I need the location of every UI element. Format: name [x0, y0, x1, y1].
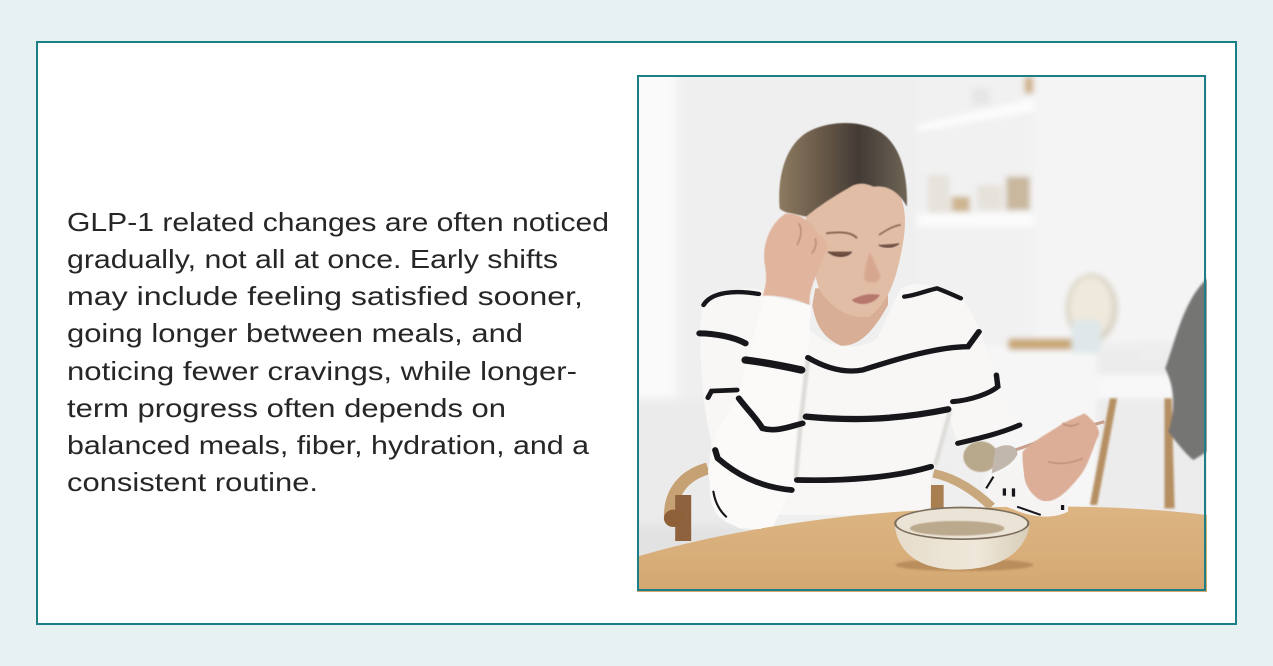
- body paragraph: [67, 207, 609, 497]
- body paragraph: GLP-1 related changes are often noticed: [67, 207, 609, 237]
- woman: hand on forehead: [762, 213, 827, 305]
- body paragraph: consistent routine.: [67, 467, 318, 497]
- woman: hand with spoon and cuff: [963, 413, 1104, 517]
- body paragraph: term progress often depends on: [67, 393, 506, 423]
- body paragraph: going longer between meals, and: [67, 318, 523, 348]
- bowl of oatmeal: [894, 507, 1033, 571]
- sweater stripes: [700, 288, 1020, 490]
- body paragraph: balanced meals, fiber, hydration, and a: [67, 430, 590, 460]
- woman: hair: [779, 123, 907, 217]
- woman: elbow resting on table: [710, 490, 761, 529]
- photo: woman eating oatmeal at a table: [622, 62, 1212, 592]
- body paragraph: may include feeling satisfied sooner,: [67, 281, 583, 311]
- table: [637, 506, 1207, 592]
- woman: neck and face: [806, 180, 905, 346]
- woman: sweater: [700, 284, 984, 528]
- body paragraph: gradually, not all at once. Early shifts: [67, 244, 558, 274]
- blurred kitchen background: [639, 75, 1207, 556]
- photo teal border: [638, 76, 1205, 590]
- body paragraph: noticing fewer cravings, while longer-: [67, 356, 577, 386]
- chair: [664, 468, 992, 541]
